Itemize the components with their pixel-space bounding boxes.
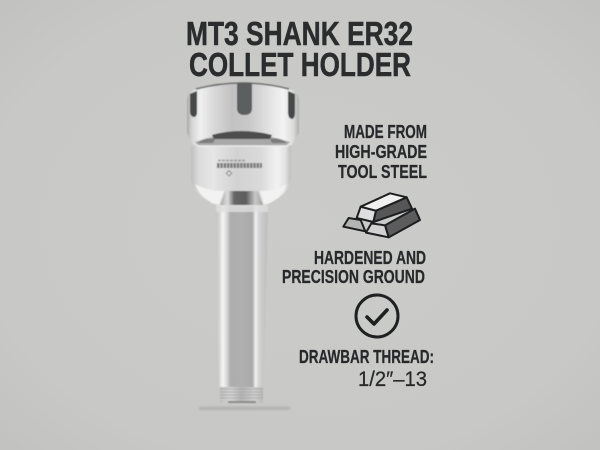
engraved marking — [217, 160, 262, 176]
left slot — [190, 91, 197, 117]
chamfer highlights — [195, 184, 287, 204]
collet holder tool — [187, 82, 299, 410]
title: COLLET HOLDER — [189, 46, 411, 83]
right ingot side — [385, 209, 420, 237]
top ingot side — [373, 197, 412, 222]
nut groove — [195, 131, 290, 146]
top ingot top — [361, 193, 407, 211]
threaded tip — [220, 386, 263, 403]
text: drawbar thread — [299, 347, 434, 391]
text: hardened and precision ground: HARDENED AND — [314, 248, 426, 268]
body — [191, 146, 291, 206]
text: drawbar thread: 1/2″–13 — [358, 368, 427, 391]
text: hardened and precision ground — [282, 248, 426, 287]
neck — [220, 191, 263, 205]
icon: steel ingots — [343, 193, 420, 237]
collet nut — [187, 83, 299, 147]
title — [186, 15, 413, 83]
text: made from high-grade tool steel — [335, 122, 427, 182]
right slot — [288, 91, 295, 119]
top rim — [196, 83, 289, 89]
text: drawbar thread: DRAWBAR THREAD: — [299, 347, 434, 367]
text: hardened and precision ground: PRECISION GROUND — [282, 267, 425, 287]
collar — [216, 205, 268, 212]
text: made from high-grade tool steel: MADE FROM — [344, 122, 427, 142]
top ingot end — [357, 207, 376, 222]
icon: check circle — [356, 295, 398, 337]
title: MT3 SHANK ER32 — [186, 15, 413, 52]
right ingot end — [366, 223, 389, 237]
center slot — [237, 82, 252, 115]
left ingot — [343, 218, 365, 231]
text: made from high-grade tool steel: HIGH-GRADE — [335, 142, 427, 162]
text: made from high-grade tool steel: TOOL STEEL — [338, 162, 427, 182]
tapered shank — [216, 206, 268, 387]
floor shadow — [199, 407, 290, 410]
